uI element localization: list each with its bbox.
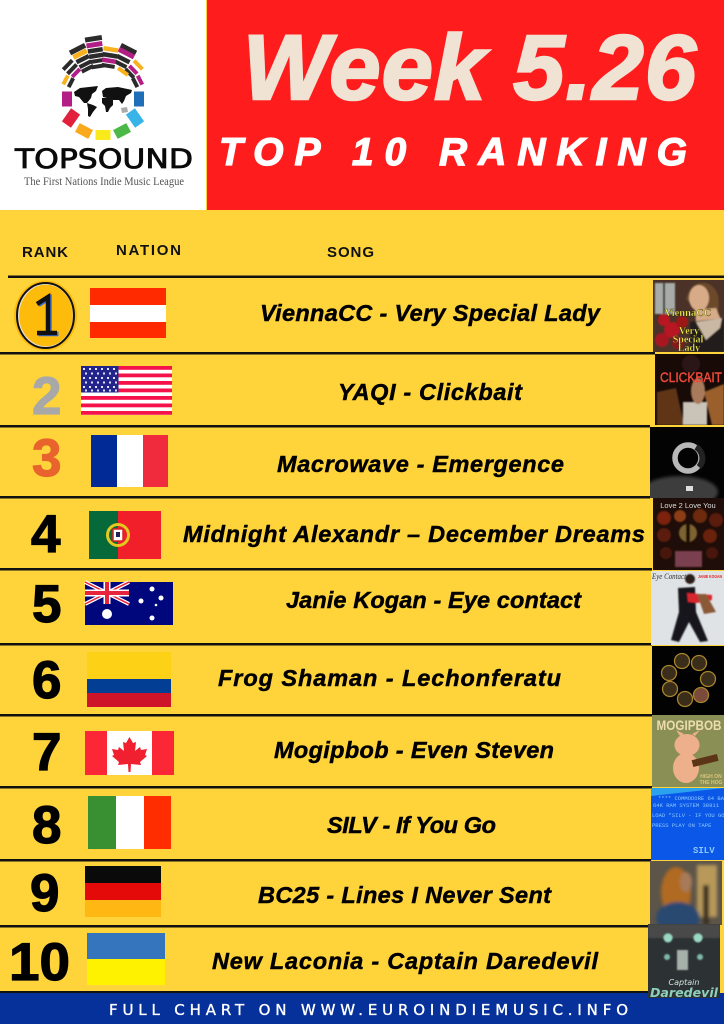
flag: Austria (90, 288, 166, 338)
flag: USA (81, 366, 172, 415)
album cover 8: 64K RAM SYSTEM 38911 (653, 802, 720, 809)
album cover 1: ViennaCC (664, 308, 712, 319)
icon: equalizer world logo (62, 35, 144, 140)
footer text: FULL CHART ON WWW.EUROINDIEMUSIC.INFO (109, 1001, 628, 1019)
rank 5: 5 (32, 575, 61, 634)
row 10 (9, 933, 598, 992)
panel: header banner (207, 0, 724, 210)
song 5: Janie Kogan - Eye contact (286, 587, 582, 613)
row 6 (32, 646, 724, 715)
album cover 1: Special (673, 334, 703, 346)
row 2 (32, 354, 724, 426)
row 4 (31, 498, 724, 570)
flag: Canada (85, 731, 174, 775)
flag: Germany (85, 866, 161, 917)
row 9 (31, 861, 722, 925)
album cover 8: **** COMMODORE 64 BA (658, 795, 724, 802)
album cover 8 (651, 788, 724, 860)
album cover 10: Captain (669, 978, 699, 987)
row 1 (14, 280, 724, 354)
album cover 2 (655, 354, 724, 425)
song 6: Frog Shaman - Lechonferatu (218, 665, 561, 691)
rank 3: 3 (32, 429, 61, 488)
rank 9: 9 (30, 864, 59, 923)
table header labels: RANK (22, 244, 68, 261)
rank 6: 6 (32, 651, 61, 710)
icon: world map (74, 86, 132, 117)
subtitle: TOP 10 RANKING (219, 131, 687, 174)
flag: Australia (85, 582, 173, 625)
flag: Ukraine (87, 933, 165, 985)
album cover 10 (648, 924, 720, 1000)
album cover 6 (652, 646, 724, 715)
album cover 8: PRESS PLAY ON TAPE (652, 822, 712, 829)
song 3: Macrowave - Emergence (277, 451, 564, 477)
song 10: New Laconia - Captain Daredevil (212, 948, 598, 974)
album cover 4: Love 2 Love You (660, 501, 716, 510)
album cover 1: Very (679, 326, 699, 337)
row 8 (32, 788, 724, 860)
album cover 10: Daredevil (650, 986, 719, 1000)
album cover 4 (653, 498, 724, 570)
rank 10: 10 (9, 933, 70, 992)
title: week: Week 5.26 (243, 17, 697, 119)
song 2: YAQI - Clickbait (338, 379, 523, 405)
album cover 5 (651, 571, 724, 645)
song 8: SILV - If You Go (327, 812, 496, 838)
table header labels: SONG (327, 244, 374, 261)
song 9: BC25 - Lines I Never Sent (258, 882, 552, 908)
album cover 7 (652, 715, 724, 787)
flag: Italy (88, 796, 171, 849)
album cover 5: Eye Contact (651, 572, 687, 581)
song 1: ViennaCC - Very Special Lady (260, 300, 602, 326)
panel: footer (0, 993, 724, 1024)
logo wordmark: TOPSOUND (14, 144, 193, 175)
rank badge 1 (14, 280, 77, 350)
album cover 7: HIGH ON (700, 774, 722, 780)
rank 4: 4 (31, 505, 61, 564)
table header labels: NATION (116, 242, 181, 259)
rank 8: 8 (32, 796, 61, 855)
rank 7: 7 (32, 723, 61, 782)
flag: France (91, 435, 168, 487)
rank 2: 2 (32, 367, 61, 426)
album cover 3 (650, 427, 724, 498)
album cover 9 (650, 861, 722, 925)
row 7 (32, 715, 724, 787)
flag: Portugal (89, 511, 161, 559)
song 4: Midnight Alexandr – December Dreams (183, 521, 645, 547)
row divider lines (0, 276, 724, 993)
table header labels (22, 242, 374, 261)
row 5 (32, 571, 724, 645)
album cover 1 (653, 280, 724, 354)
panel: logo (0, 0, 206, 210)
row 3 (32, 427, 724, 498)
logo tagline: The First Nations Indie Music League (24, 176, 184, 188)
album cover 8: SILV (693, 846, 715, 856)
album cover 1: Lady (678, 343, 700, 354)
song 7: Mogipbob - Even Steven (274, 737, 554, 763)
flag: Colombia (87, 652, 171, 707)
album cover 7: THE HOG (700, 780, 722, 786)
